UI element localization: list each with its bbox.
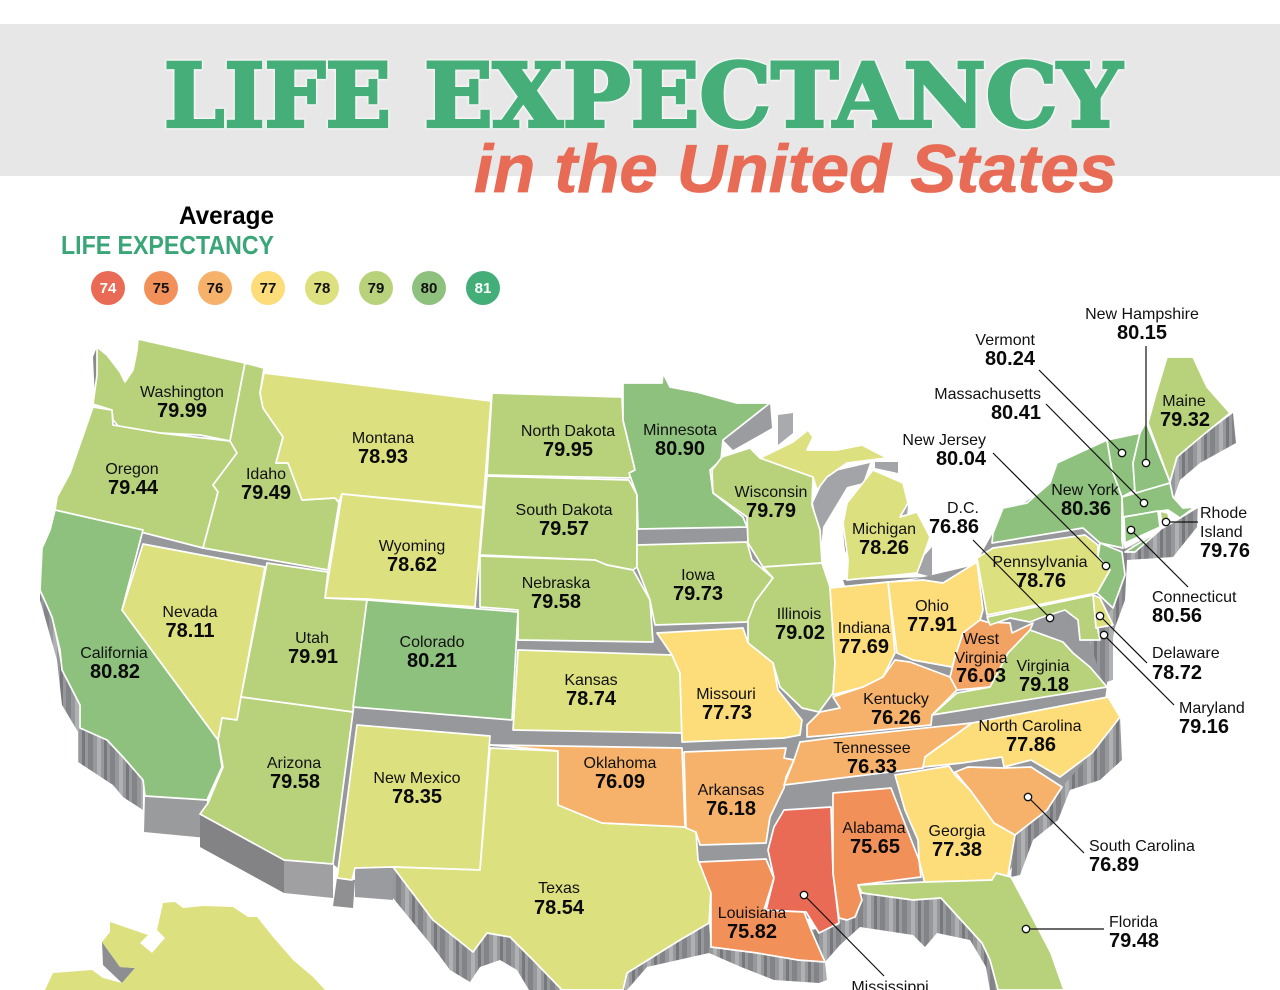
state: Wisconsin [712,448,822,567]
state labels: Kentucky [863,691,929,708]
state labels: Missouri [696,686,756,703]
state labels: 75.82 [727,921,777,943]
legend scale: 79 [368,280,384,297]
US map [40,306,1250,990]
state: Colorado [353,600,518,720]
state labels: Idaho [246,466,286,483]
callout: Rhode Island: 79.76 [1200,540,1250,562]
state labels: 77.38 [932,839,982,861]
callout: D.C.: D.C. [947,500,979,517]
state labels: 78.35 [392,786,442,808]
callout: Delaware: Delaware [1152,645,1220,662]
state: Washington [93,339,245,441]
state labels: Oregon [105,461,159,478]
state labels: 78.26 [859,537,909,559]
callout: South Carolina: South Carolina [1089,838,1195,855]
legend [61,202,500,305]
legend heading: LIFE EXPECTANCY [61,230,274,260]
state labels: Alabama [842,820,906,837]
state labels [80,384,1210,943]
state labels: 79.49 [241,482,291,504]
state labels: Illinois [777,606,821,623]
Alaska wall [102,942,135,983]
legend heading: Average [179,202,274,230]
state labels: South Dakota [516,502,613,519]
state: North Carolina [923,697,1120,777]
state labels: Oklahoma [584,755,657,772]
state labels: 78.11 [166,620,214,642]
callout: Rhode Island [1162,505,1250,562]
state labels: 77.73 [702,702,752,724]
state labels: Louisiana [718,905,786,922]
state: Vermont [1107,433,1140,497]
state: Tennessee [784,723,972,785]
callout: South Carolina [1024,793,1195,876]
callout: Vermont [975,332,1126,457]
state labels: 79.32 [1160,409,1210,431]
state: Minnesota [623,373,770,529]
state: California [40,510,222,800]
state labels: 79.58 [270,771,320,793]
state labels: 80.36 [1061,498,1111,520]
state labels: New Mexico [373,770,461,787]
state: Iowa [637,542,773,625]
state: Alabama [833,788,921,920]
callout: Florida [1022,914,1159,952]
state: Texas [393,748,711,990]
state: Michigan [760,430,930,580]
legend scale: 74 [100,280,117,297]
state labels: Indiana [838,620,890,637]
callout: New Hampshire: New Hampshire [1085,306,1199,323]
legend scale: 75 [153,280,169,297]
callout: Connecticut: Connecticut [1152,589,1237,606]
subtitle: in the United States [474,131,1117,207]
state labels: Texas [538,880,580,897]
state labels: 75.65 [850,836,900,858]
state labels: 79.91 [288,646,338,668]
legend scale: 76 [207,280,223,297]
states [40,339,1230,990]
state: Oregon [55,407,237,548]
state: New York [992,440,1160,552]
legend heading [61,202,274,260]
state labels: 78.54 [534,897,585,919]
state labels: West [963,631,1000,648]
state: Wyoming [325,494,483,607]
state labels: Virginia [1016,658,1070,675]
state labels: 77.91 [907,614,957,636]
state labels: Tennessee [833,740,911,757]
state labels: Michigan [852,521,916,538]
callout: New Jersey: New Jersey [902,432,986,449]
state labels: New York [1051,482,1120,499]
state: Maryland [987,595,1100,640]
state labels: Kansas [564,672,618,689]
state labels: 79.99 [157,400,207,422]
state: North Dakota [487,393,635,478]
state: West Virginia [950,620,1033,690]
callout: South Carolina: 76.89 [1089,854,1139,876]
state: South Dakota [480,476,637,570]
state: Louisiana [699,859,825,962]
state: South Carolina [955,767,1062,835]
state: New Jersey [1097,543,1125,608]
callout: D.C.: 76.86 [929,516,979,538]
state labels: 80.90 [655,438,705,460]
callout: New Jersey: 80.04 [936,448,987,470]
state labels: Nevada [162,604,218,621]
callout: Mississippi [800,891,929,990]
legend scale: 77 [260,280,276,297]
callout: Massachusetts: 80.41 [991,402,1041,424]
state labels: 78.93 [358,446,408,468]
state labels: Virginia [954,650,1008,667]
state labels: Nebraska [522,575,590,592]
state labels: Pennsylvania [992,554,1088,571]
state: Georgia [895,766,1015,884]
state labels: 76.09 [595,771,645,793]
state labels: 78.74 [566,688,617,710]
state: Ohio [888,562,983,667]
state: Missouri [657,628,802,742]
callout: Delaware: 78.72 [1152,662,1202,684]
callout: Maryland: Maryland [1179,700,1245,717]
state: Florida [858,873,1064,990]
title: EXPECTANCY [424,44,1123,148]
state labels: 79.58 [531,591,581,613]
state labels: Colorado [400,634,465,651]
state labels: 79.95 [543,439,593,461]
state labels: California [80,645,148,662]
state labels: 80.82 [90,661,140,683]
callout: Florida: Florida [1109,914,1158,931]
state: Kansas [513,650,682,733]
state labels: 79.44 [108,477,159,499]
state labels: 77.86 [1006,734,1056,756]
state: New Hampshire [1133,422,1170,493]
state labels: North Dakota [521,423,615,440]
state labels: 76.26 [871,707,921,729]
state: Mississippi [766,807,839,933]
callout: Massachusetts: Massachusetts [934,386,1041,403]
state: Connecticut [1124,511,1160,543]
callout: D.C. [929,500,1054,622]
legend scale: 81 [475,280,491,297]
callout: New Hampshire [1085,306,1199,467]
state: Kentucky [807,660,957,737]
state labels: Wyoming [379,538,445,555]
state: Montana [260,373,491,507]
state: Illinois [748,563,835,712]
callout: Maryland: 79.16 [1179,716,1229,738]
state labels: 76.03 [956,665,1006,687]
state: Delaware [1093,595,1113,628]
state: Idaho [203,363,339,570]
state labels: 78.62 [387,554,437,576]
state: Nebraska [480,556,653,642]
callout: Florida: 79.48 [1109,930,1159,952]
state labels: 79.79 [746,500,796,522]
state: Nevada [122,544,265,740]
3D extrusion walls [40,347,1236,990]
state labels: 77.69 [839,636,889,658]
state: Arizona [200,697,353,864]
title: LIFE [164,44,391,148]
state: Oklahoma [490,745,685,827]
state: New Mexico [337,725,490,880]
state labels: 79.73 [673,583,723,605]
state labels: Maine [1162,393,1206,410]
legend scale: 80 [421,280,437,297]
callout: Massachusetts [934,386,1148,507]
callout: New Hampshire: 80.15 [1117,322,1167,344]
state: Indiana [830,582,895,695]
state: Massachusetts [1122,483,1195,518]
state labels: 76.33 [847,756,897,778]
callout: Delaware [1096,612,1220,684]
header band [0,24,1280,176]
state labels: Utah [295,630,329,647]
state: Maine [1148,357,1230,482]
state labels: Arizona [267,755,321,772]
state labels: Minnesota [643,422,717,439]
callout: Connecticut: 80.56 [1152,605,1202,627]
state labels: 76.18 [706,798,756,820]
callout: New Jersey [902,432,1110,570]
state: Rhode Island [1160,511,1170,527]
callout: Connecticut [1127,526,1237,627]
legend scale: 78 [314,280,330,297]
callout: Rhode Island: Rhode [1200,505,1247,522]
state labels: Wisconsin [735,484,807,501]
state: Alaska [45,902,325,990]
state labels: Arkansas [698,782,764,799]
state labels: Iowa [681,567,715,584]
state labels: 78.76 [1016,570,1066,592]
state: Pennsylvania [977,535,1110,615]
state: Arkansas [684,748,794,845]
state labels: Ohio [915,598,949,615]
state: Virginia [932,630,1107,715]
state labels: 79.57 [539,518,589,540]
callout: Vermont: 80.24 [985,348,1036,370]
callout: Rhode Island: Island [1200,524,1243,541]
legend scale [91,271,500,305]
state labels: Montana [352,430,414,447]
state labels: Georgia [929,823,986,840]
callout: Vermont: Vermont [975,332,1036,349]
callout: Maryland [1100,631,1245,738]
state labels: 80.21 [407,650,457,672]
state: Utah [241,563,367,712]
state labels: Washington [140,384,224,401]
state labels: 79.02 [775,622,825,644]
state labels: North Carolina [978,718,1082,735]
state labels: 79.18 [1019,674,1069,696]
